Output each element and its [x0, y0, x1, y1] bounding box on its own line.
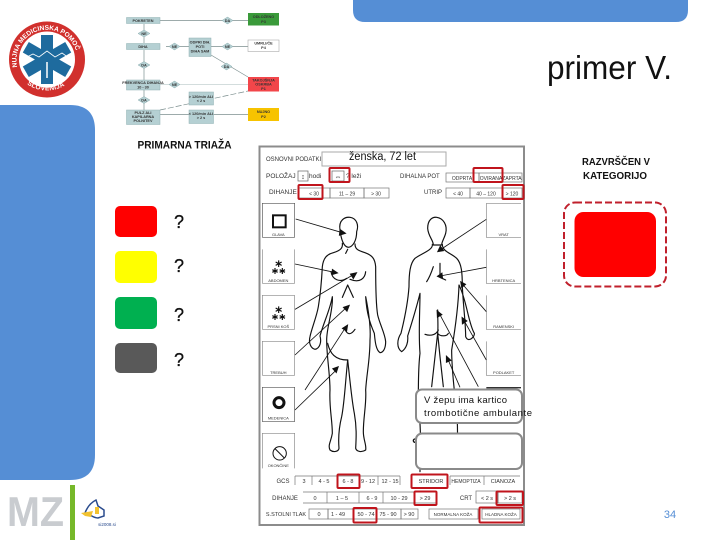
flowchart: primary triage algorithm: 10 - 30: [137, 86, 149, 90]
bottom scoring rows: 9 - 12: [361, 479, 375, 485]
flowchart: primary triage algorithm: P4: [261, 46, 267, 50]
form header: basic data: ⇔: [334, 174, 342, 181]
bottom scoring rows: 12 - 15: [381, 479, 399, 485]
logo: emergency medical service: SLOVENIJA: [28, 81, 64, 90]
flowchart: primary triage algorithm: DA: [141, 98, 147, 102]
flowchart: primary triage algorithm: DA: [141, 64, 147, 68]
triage colour: grey: [115, 343, 157, 373]
body diagram with injury arrows, drawn in 3x coordinates: TREBUH: [270, 370, 287, 375]
flowchart: primary triage algorithm: > 2 s: [197, 116, 205, 120]
form header: basic data: 11 – 29: [339, 192, 355, 198]
EU presidency logo: [81, 500, 116, 527]
body diagram with injury arrows, drawn in 3x coordinates: [262, 203, 521, 472]
bottom scoring rows: HEMOPTIZA: [451, 479, 481, 485]
flowchart: primary triage algorithm: P3: [261, 20, 266, 24]
flowchart: primary triage algorithm: DIHA: [138, 45, 148, 49]
flowchart: primary triage algorithm: POKRETEN: [132, 19, 154, 23]
form header: basic data: > 30: [371, 192, 381, 198]
flowchart: primary triage algorithm: DA: [224, 65, 229, 69]
flowchart: primary triage algorithm: FREKVENCA DIHANJA: [122, 81, 164, 85]
triage form: [260, 146, 532, 525]
patient data text: ženska, 72 let: [349, 151, 417, 163]
bottom scoring rows: 10 - 29: [390, 496, 408, 502]
injury arrows: [295, 219, 486, 410]
question mark: grey: ?: [174, 350, 184, 370]
flowchart: primary triage algorithm: DA: [225, 19, 230, 23]
question mark: red: ?: [174, 212, 184, 232]
flowchart: primary triage algorithm: KAPILARNA: [132, 115, 154, 119]
flowchart: primary triage algorithm: TAKOJŠNJA: [252, 78, 275, 82]
body diagram with injury arrows, drawn in 3x coordinates: ABDOMEN: [268, 278, 289, 283]
form header: basic data: > 120: [506, 192, 519, 198]
bottom scoring rows: 1 - 49: [331, 512, 345, 518]
form header: basic data: < 40: [453, 192, 463, 198]
bottom scoring rows: [266, 476, 522, 519]
form header: basic data: ZAPRTA: [502, 176, 522, 182]
flowchart: primary triage algorithm: NUJNO: [257, 110, 270, 114]
injury panels: [262, 203, 521, 468]
bottom scoring rows: > 90: [404, 512, 414, 518]
flowchart: primary triage algorithm: [122, 13, 279, 124]
question mark: yellow: ?: [174, 256, 184, 276]
back body: [398, 217, 478, 472]
body diagram with injury arrows, drawn in 3x coordinates: RAMENSKI: [493, 324, 514, 329]
flowchart: primary triage algorithm: < 2 s: [197, 99, 205, 103]
callout: thrombotic clinic card: V žepu ima kartico: [424, 395, 507, 406]
bottom scoring rows: > 2 s: [504, 496, 516, 502]
heading: sorted into category: RAZVRŠČEN V: [582, 155, 650, 168]
form header: basic data: ? leži: [346, 173, 361, 180]
title: primer V.: [547, 50, 672, 87]
form header: basic data: POLOŽAJ: [266, 171, 296, 180]
bottom scoring rows: < 2 s: [481, 496, 493, 502]
top right blue banner: [353, 0, 688, 22]
form header: basic data: [266, 152, 522, 198]
flowchart: primary triage algorithm: ODPRI DIH.: [190, 40, 210, 44]
triage colour: yellow: [115, 251, 157, 283]
flowchart: primary triage algorithm: NE: [172, 45, 178, 49]
bottom scoring rows: CIANOZA: [491, 479, 516, 485]
heading: primary triage: PRIMARNA TRIAŽA: [138, 138, 232, 152]
front body: [309, 217, 386, 452]
form header: basic data: UTRIP: [424, 190, 442, 196]
body diagram with injury arrows, drawn in 3x coordinates: HRBTENICA: [492, 278, 516, 283]
dashed category frame: [564, 202, 666, 286]
bottom scoring rows: 50 - 74: [357, 512, 375, 518]
body diagram with injury arrows, drawn in 3x coordinates: GLAVA: [272, 232, 285, 237]
flowchart: primary triage algorithm: POTI: [196, 45, 204, 49]
flowchart: primary triage algorithm: ODLOŽENO: [253, 14, 274, 19]
bottom scoring rows: 6 - 8: [342, 479, 354, 485]
bottom scoring rows: 6 - 9: [366, 496, 378, 502]
heading: sorted into category: [582, 155, 650, 182]
flowchart: primary triage algorithm: NE: [172, 83, 178, 87]
triage colour: red: [115, 206, 157, 237]
form header: basic data: DIHANJE: [269, 189, 297, 196]
callout: thrombotic clinic card: [416, 390, 532, 423]
left blue panel: [0, 105, 95, 480]
form header: basic data: OSNOVNI PODATKI: [266, 157, 322, 163]
flowchart: primary triage algorithm: > 120/min ALI: [189, 95, 213, 99]
form header: basic data: < 30: [309, 192, 319, 198]
bottom scoring rows: DIHANJE: [272, 496, 298, 502]
MZ logo: MZ: [7, 488, 64, 535]
bottom scoring rows: 3: [302, 479, 306, 485]
red selection marks: [298, 168, 524, 522]
bottom scoring rows: GCS: [276, 479, 290, 485]
empty callout: [416, 434, 522, 469]
flowchart: primary triage algorithm: DIHA SAM: [191, 50, 209, 54]
form header: basic data: ↕: [301, 174, 305, 181]
form header: basic data: hodi: [309, 173, 321, 180]
page number: 34: [664, 509, 676, 521]
bottom scoring rows: NORMALNA KOŽA: [434, 510, 472, 517]
form header: basic data: 40 – 120: [476, 192, 496, 198]
question mark: green: ?: [174, 305, 184, 325]
body diagram with injury arrows, drawn in 3x coordinates: PRSNI KOŠ: [267, 324, 290, 329]
bottom scoring rows: 1 – 5: [336, 496, 348, 502]
bottom scoring rows: CRT: [460, 496, 472, 502]
bottom scoring rows: 75 - 90: [379, 512, 397, 518]
bottom scoring rows: > 29: [420, 496, 430, 502]
bottom scoring rows: STRIDOR: [419, 479, 443, 485]
flowchart: primary triage algorithm: P2: [261, 115, 266, 119]
bottom scoring rows: HLADNA KOŽA: [485, 510, 517, 517]
body diagram with injury arrows, drawn in 3x coordinates: PODLAKET: [493, 370, 515, 375]
form header: basic data: DIHALNA POT: [400, 174, 440, 180]
bottom scoring rows: S.STOLNI TLAK: [266, 512, 306, 518]
body diagram with injury arrows, drawn in 3x coordinates: VRAT: [498, 232, 509, 237]
EU presidency logo: si2008.si: [98, 522, 116, 527]
flowchart: primary triage algorithm: OSKRBA: [255, 82, 272, 86]
heading: sorted into category: KATEGORIJO: [583, 170, 647, 182]
bottom scoring rows: 0: [313, 496, 317, 502]
bottom scoring rows: 0: [317, 512, 321, 518]
logo: emergency medical service: NUJNA MEDICINSKA POMOČ: [12, 25, 82, 68]
triage colour: green: [115, 297, 157, 329]
flowchart: primary triage algorithm: NE: [225, 45, 231, 49]
bottom scoring rows: 4 - 5: [318, 479, 330, 485]
callout: thrombotic clinic card: trombotične ambulante: [424, 408, 532, 419]
flowchart: primary triage algorithm: PULZ ALI: [135, 111, 151, 115]
flowchart: primary triage algorithm: < 120/min ALI: [189, 112, 213, 116]
body diagram with injury arrows, drawn in 3x coordinates: OKONČINE: [268, 463, 289, 468]
form header: basic data: ODPRTA: [452, 176, 473, 182]
flowchart: primary triage algorithm: UMRLI/ČE: [254, 40, 273, 46]
result category: red: [574, 212, 656, 277]
logo: emergency medical service: [9, 22, 85, 98]
flowchart: primary triage algorithm: POLNITEV: [134, 119, 153, 123]
form header: basic data: OVIRANA: [480, 176, 503, 182]
flowchart: primary triage algorithm: P1: [261, 87, 266, 91]
flowchart: primary triage algorithm: NE: [141, 32, 147, 36]
body diagram with injury arrows, drawn in 3x coordinates: MEDENICA: [268, 416, 289, 421]
